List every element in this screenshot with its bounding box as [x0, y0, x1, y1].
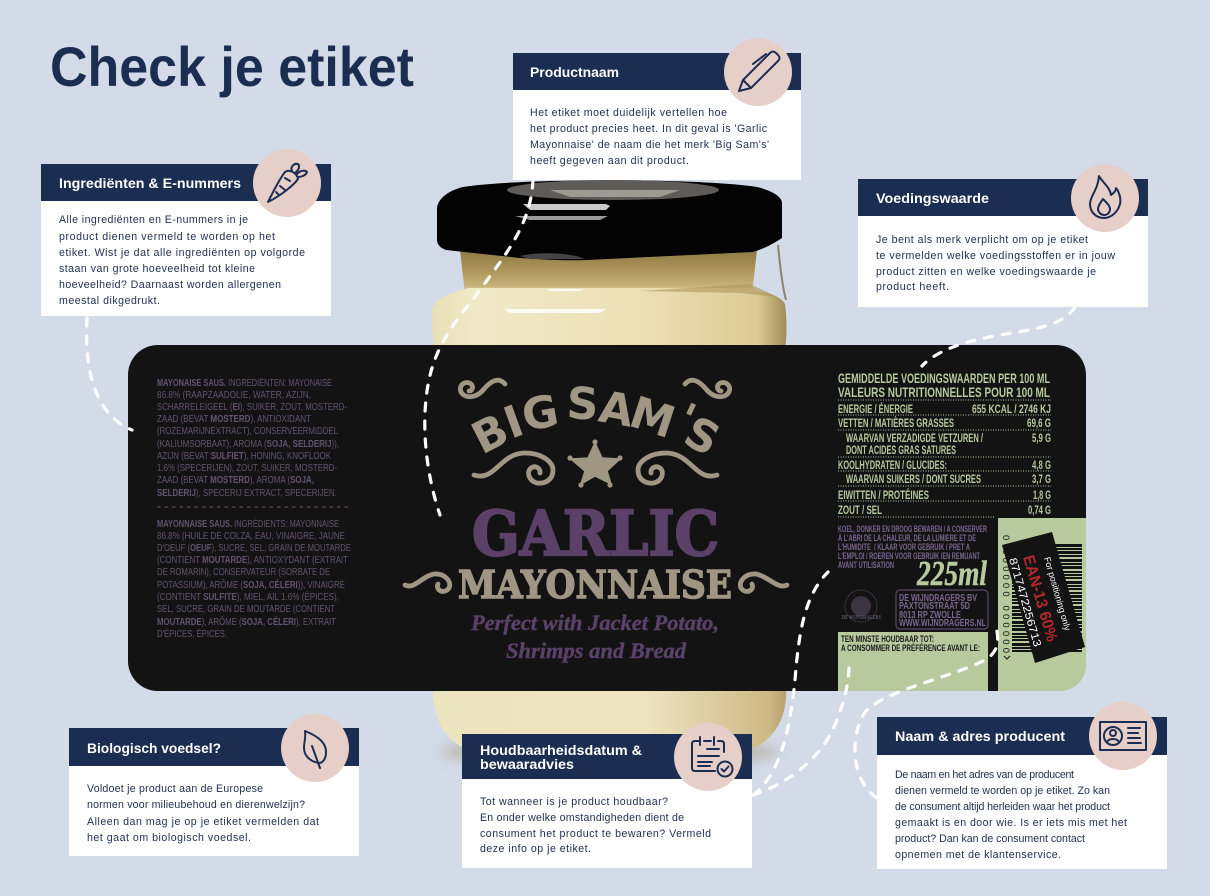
barcode: For positioning only [1042, 556, 1073, 632]
text: biologisch voedsel: Voldoet je product aan de Europese [87, 783, 263, 795]
ingredient list: DE ROMARIN), CONSERVATEUR (SORBATE DE [157, 566, 330, 578]
producer address: 8013 RP ZWOLLE [899, 610, 961, 621]
icon: calendar [674, 723, 742, 791]
nutrition table: 5,9 G [1032, 433, 1051, 445]
ingredient list: (ROZEMARIJNEXTRACT), CONSERVEERMIDDEL [157, 425, 338, 437]
producer address [896, 590, 988, 629]
text: productnaam: heeft gegeven aan dit product. [530, 155, 689, 167]
ingredient list [157, 377, 351, 640]
text: ingrediënten: hoeveelheid? Daarnaast worden allergenen [59, 279, 281, 291]
brand logo: GARLIC [472, 497, 719, 570]
ingredient list: (CONTIENT MOUTARDE), ANTIOXYDANT (EXTRAIT [157, 554, 348, 566]
ingredient list: MOUTARDE), ARÔME (SOJA, CÉLERI), EXTRAIT [157, 615, 336, 628]
text: biologisch voedsel: Alleen dan mag je op je etiket vermelden dat [87, 816, 319, 828]
heading: houdbaarheidsdatum: Houdbaarheidsdatum & [480, 743, 642, 758]
text: houdbaarheidsdatum: consument het product te bewaren? Vermeld [480, 828, 711, 840]
producer address: PAXTONSTRAAT 5D [899, 601, 970, 612]
panel: houdbaarheidsdatum [462, 723, 752, 868]
text: naam en adres producent: opnemen met de klantenservice. [895, 849, 1061, 861]
barcode: 0 000000 000000 [1000, 535, 1011, 653]
text: voedingswaarde: Je bent als merk verplicht om op je etiket [876, 234, 1088, 246]
heading: houdbaarheidsdatum [480, 743, 642, 772]
text: productnaam: het product precies heet. In dit geval is 'Garlic [530, 123, 768, 135]
text: voedingswaarde: product heeft. [876, 281, 949, 293]
text: voedingswaarde: product zitten en welke voedingswaarde je [876, 266, 1096, 278]
ingredient list: MAYONAISE SAUS. INGREDIËNTEN: MAYONAISE [157, 377, 332, 389]
nutrition table: 4,8 G [1032, 460, 1051, 472]
nutrition table: 0,74 G [1028, 505, 1051, 517]
nutrition table: EIWITTEN / PROTÉINES [838, 489, 929, 502]
text: naam en adres producent: gemaakt is en door wie. Is er iets mis met het [895, 817, 1127, 829]
storage advice: KOEL, DONKER EN DROOG BEWAREN / A CONSERVER [838, 524, 987, 535]
text: productnaam: Het etiket moet duidelijk vertellen hoe [530, 107, 727, 119]
arrow: best before date to label [753, 572, 828, 795]
text: naam en adres producent [895, 769, 1127, 861]
ingredient list: ZAAD (BEVAT MOSTERD), AROMA (SOJA, [157, 474, 314, 486]
text: houdbaarheidsdatum: Tot wanneer is je product houdbaar? [480, 796, 668, 808]
icon: flame [1071, 164, 1139, 232]
heading: voedingswaarde: Voedingswaarde [876, 191, 990, 206]
text: ingrediënten: meestal dikgedrukt. [59, 295, 160, 307]
text: houdbaarheidsdatum: deze info op je etiket. [480, 843, 591, 855]
text: productnaam [530, 107, 769, 167]
nutrition table: DONT ACIDES GRAS SATURES [846, 445, 956, 457]
text: ingrediënten [59, 214, 305, 307]
text: ingrediënten: product dienen vermeld te worden op het [59, 231, 275, 243]
text: naam en adres producent: product? Dan kan de consument contact [895, 833, 1085, 845]
storage advice: L'EMPLOI / ROEREN VOOR GEBRUIK /EN REMUANT [838, 551, 980, 562]
barcode: 8717472256713 [1006, 557, 1043, 648]
producer address: WWW.WIJNDRAGERS.NL [899, 618, 986, 629]
nutrition table: VALEURS NUTRITIONNELLES POUR 100 ML [838, 384, 1050, 400]
nutrition table: 1,8 G [1033, 490, 1051, 502]
product label [0, 0, 1086, 691]
nutrition table: VETTEN / MATIÈRES GRASSES [838, 417, 954, 430]
icon: pencil [724, 38, 792, 106]
ingredient list: 86.8% (HUILE DE COLZA, EAU, VINAIGRE, JAUNE [157, 530, 345, 542]
text: productnaam: Mayonnaise' de naam die het merk 'Big Sam's' [530, 139, 769, 151]
brand logo: MAYONNAISE [458, 562, 732, 607]
arrow: storage advice to label [753, 658, 849, 795]
producer seal: DE WIJNDRAGERS [842, 615, 881, 621]
text: houdbaarheidsdatum [480, 796, 711, 855]
nutrition table: GEMIDDELDE VOEDINGSWAARDEN PER 100 ML [838, 370, 1050, 386]
heading: houdbaarheidsdatum: bewaaradvies [480, 757, 574, 772]
text: biologisch voedsel: normen voor milieubehoud en dierenwelzijn? [87, 799, 305, 811]
text: biologisch voedsel [87, 783, 319, 844]
heading: ingrediënten: Ingrediënten & E-nummers [59, 176, 241, 191]
storage advice [838, 524, 987, 571]
title: Check je etiket [50, 35, 414, 98]
panel: ingrediënten [41, 149, 331, 316]
text: naam en adres producent: dienen vermeld te worden op je etiket. Zo kan [895, 785, 1110, 797]
ingredient list: (CONTIENT SULFITE), MIEL, AIL 1.6% (ÉPICES), [157, 590, 339, 603]
text: ingrediënten: Alle ingrediënten en E-nummers in je [59, 214, 248, 226]
arrow: nutrition to label [922, 307, 1075, 366]
panel: productnaam [513, 38, 801, 180]
jar photo [432, 180, 786, 768]
text: voedingswaarde: te vermelden welke voedingsstoffen er in jouw [876, 250, 1115, 262]
text: naam en adres producent: De naam en het adres van de producent [895, 769, 1074, 781]
heading: productnaam: Productnaam [530, 65, 619, 80]
nutrition table: 3,7 G [1032, 474, 1051, 486]
text: ingrediënten: staan van grote hoeveelheid tot kleine [59, 263, 255, 275]
nutrition table: 655 KCAL / 2746 KJ [972, 404, 1051, 416]
storage advice: AVANT UTILISATION [838, 560, 894, 571]
heading: biologisch voedsel: Biologisch voedsel? [87, 741, 221, 756]
ingredient list: ZAAD (BEVAT MOSTERD), ANTIOXIDANT [157, 413, 311, 425]
green panel: barcode area [998, 518, 1086, 691]
green panel: best before: TEN MINSTE HOUDBAAR TOT: [841, 634, 934, 645]
brand logo [0, 0, 787, 663]
text: houdbaarheidsdatum: En onder welke omstandigheden dient de [480, 812, 684, 824]
brand logo: Shrimps and Bread [506, 638, 687, 663]
green panel: best before [838, 632, 988, 691]
icon: carrot [253, 149, 321, 217]
nutrition table: 69,6 G [1027, 418, 1051, 430]
nutrition table: ZOUT / SEL [838, 505, 882, 517]
ingredient list: 1.6% (SPECERIJEN), ZOUT, SUIKER, MOSTERD- [157, 462, 337, 474]
ingredient list: D'ÉPICES, ÉPICES. [157, 627, 227, 640]
volume: 225ml [916, 554, 987, 593]
ingredient list: SCHARRELEIGEEL (EI), SUIKER, ZOUT, MOSTERD- [157, 401, 347, 413]
green panel: best before: A CONSOMMER DE PRÉFÉRENCE AVANT LE: [841, 643, 980, 654]
text: voedingswaarde [876, 234, 1115, 293]
nutrition table: WAARVAN VERZADIGDE VETZUREN / [846, 433, 984, 445]
ingredient list: AZIJN (BEVAT SULFIET), HONING, KNOFLOOK [157, 450, 331, 462]
ingredient list: SELDERIJ), SPECERIJ EXTRACT, SPECERIJEN. [157, 487, 337, 499]
ingredient list: (KALIUMSORBAAT), AROMA (SOJA, SELDERIJ)), [157, 438, 339, 450]
panel: voedingswaarde [858, 164, 1148, 307]
storage advice: L'HUMIDITE / KLAAR VOOR GEBRUIK / PRET A [838, 542, 970, 553]
icon: leaf [281, 714, 349, 782]
arrow: ingredients to label [87, 318, 132, 430]
text: biologisch voedsel: het gaat om biologisch voedsel. [87, 832, 251, 844]
ingredient list: D'OEUF (OEUF), SUCRE, SEL, GRAIN DE MOUTARDE [157, 542, 351, 554]
barcode: EAN-13 60% [1019, 553, 1060, 644]
panel: biologisch voedsel [69, 714, 359, 856]
ingredient list: SEL, SUCRE, GRAIN DE MOUTARDE (CONTIENT [157, 603, 335, 615]
nutrition table: KOOLHYDRATEN / GLUCIDES: [838, 460, 947, 472]
barcode [1000, 532, 1085, 663]
nutrition table: ENERGIE / ÉNERGIE [838, 403, 913, 416]
ingredient list: POTASSIUM), ARÔME (SOJA, CÉLERI)), VINAIGRE [157, 578, 345, 591]
panel: naam en adres producent [877, 702, 1167, 869]
text: naam en adres producent: de consument altijd herleiden waar het product [895, 801, 1110, 813]
producer seal [842, 590, 881, 622]
arrow: producer to label [855, 622, 998, 798]
ingredient list: MAYONNAISE SAUS. INGRÉDIENTS: MAYONNAISE [157, 517, 339, 530]
arrow: product name to label [425, 180, 533, 515]
heading: naam en adres producent: Naam & adres producent [895, 729, 1066, 744]
icon: id card [1089, 702, 1157, 770]
nutrition table [838, 370, 1051, 517]
brand logo: Perfect with Jacket Potato, [470, 610, 719, 635]
storage advice: À L'ABRI DE LA CHALEUR, DE LA LUMIERE ET DE [838, 533, 976, 544]
ingredient list: 86.8% (RAAPZAADOLIE, WATER, AZIJN, [157, 389, 311, 401]
nutrition table: WAARVAN SUIKERS / DONT SUCRES [846, 474, 981, 486]
producer address: DE WIJNDRAGERS BV [899, 593, 977, 604]
text: ingrediënten: etiket. Wist je dat alle ingrediënten op volgorde [59, 247, 305, 259]
